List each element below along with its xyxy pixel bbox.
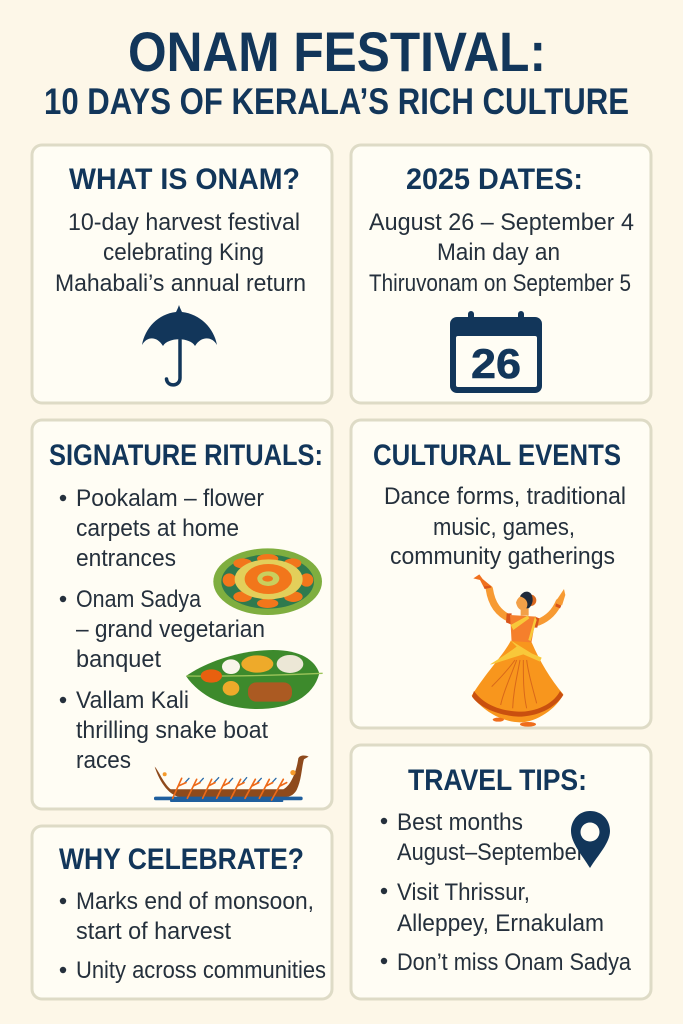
text: what is onam description: celebrating King: [103, 239, 264, 266]
icon: umbrella: [142, 305, 217, 385]
icon: calendar: 26: [471, 340, 521, 387]
list: tips: Alleppey, Ernakulam: [397, 910, 604, 937]
list: tips: Best months: [397, 809, 523, 836]
list: reasons: Unity across communities: [76, 957, 326, 984]
list: tips: Visit Thrissur,: [397, 879, 530, 906]
panel: cultural events: [351, 420, 651, 728]
text: dates description: Thiruvonam on September 5: [369, 270, 631, 297]
list: reasons: start of harvest: [76, 918, 231, 945]
text: cultural events description: Dance forms, traditional: [384, 483, 626, 510]
panel: why celebrate: [32, 826, 332, 999]
text: cultural events description: [384, 483, 626, 570]
text: dates description: Main day an: [437, 239, 560, 266]
text: what is onam description: 10-day harvest festival: [68, 209, 300, 236]
title: ONAM FESTIVAL:: [128, 20, 546, 83]
list: rituals: – grand vegetarian: [76, 616, 265, 643]
list: reasons: [60, 888, 326, 984]
heading: what is onam: WHAT IS ONAM?: [69, 163, 300, 196]
list: tips: Don’t miss Onam Sadya: [397, 949, 632, 976]
list: tips: August–September: [397, 839, 584, 866]
list: rituals: Pookalam – flower: [76, 485, 264, 512]
heading: why celebrate: WHY CELEBRATE?: [59, 843, 304, 876]
text: what is onam description: Mahabali’s annual return: [55, 270, 306, 297]
list: rituals: banquet: [76, 646, 161, 673]
icon: map pin: [571, 811, 610, 868]
panel: what is onam: [32, 145, 332, 403]
heading: cultural events: CULTURAL EVENTS: [373, 439, 621, 472]
list: reasons: Marks end of monsoon,: [76, 888, 314, 915]
icon: banana leaf meal: [186, 650, 323, 709]
heading: travel tips: TRAVEL TIPS:: [408, 764, 587, 797]
list: rituals: Onam Sadya: [76, 586, 202, 613]
list: rituals: carpets at home: [76, 515, 239, 542]
icon: snake boat: [154, 756, 309, 802]
panel: signature rituals: [32, 420, 332, 809]
icon: calendar: [450, 311, 542, 393]
heading: 2025 dates: 2025 DATES:: [406, 163, 583, 196]
list: rituals: [60, 485, 268, 774]
title: [44, 20, 629, 122]
text: cultural events description: music, games,: [433, 514, 575, 541]
text: dates description: August 26 – September 4: [369, 209, 634, 236]
list: rituals: entrances: [76, 545, 176, 572]
text: dates description: [369, 209, 634, 297]
heading: signature rituals: SIGNATURE RITUALS:: [49, 439, 323, 472]
text: what is onam description: [55, 209, 306, 297]
icon: dancer: [472, 574, 565, 727]
list: rituals: thrilling snake boat: [76, 717, 268, 744]
text: cultural events description: community gatherings: [390, 543, 615, 570]
panel: travel tips: [351, 745, 651, 999]
panel: 2025 dates: [351, 145, 651, 403]
icon: pookalam flower carpet: [213, 548, 322, 615]
list: rituals: races: [76, 747, 131, 774]
list: rituals: Vallam Kali: [76, 687, 189, 714]
list: tips: [381, 809, 632, 976]
